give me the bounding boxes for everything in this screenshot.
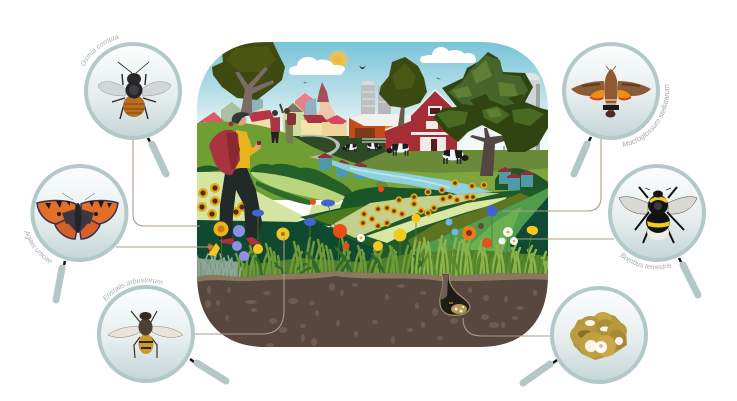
large flowers xyxy=(207,186,538,261)
bumblebee burrow xyxy=(440,273,470,315)
soil stones xyxy=(205,283,537,347)
far silos xyxy=(361,80,391,116)
species label: Aglais urticae: Aglais urticae xyxy=(24,231,52,263)
insect: hoverfly xyxy=(108,311,183,358)
town houses xyxy=(199,82,347,137)
magnifier: Eristalis arbustorum xyxy=(97,278,230,384)
soil xyxy=(197,271,548,347)
species label: Bombus terrestris: Bombus terrestris xyxy=(620,253,672,270)
insect: tortoiseshell butterfly xyxy=(37,193,118,239)
fence xyxy=(362,139,386,142)
field base right xyxy=(329,190,548,258)
flower stems xyxy=(221,205,532,262)
magnifier: bee nest xyxy=(523,288,646,383)
couple of walkers xyxy=(270,104,296,143)
left hill xyxy=(197,122,378,200)
species label: Eristalis arbustorum: Eristalis arbustorum xyxy=(103,278,162,301)
beehives xyxy=(318,153,534,190)
clouds xyxy=(289,47,476,75)
sun xyxy=(328,50,348,68)
magnifier: Bombus terrestris xyxy=(608,164,706,298)
pale strip beside lettuce xyxy=(308,200,344,215)
magnifier: Macroglossum stellatarum xyxy=(562,42,670,178)
dark crop row xyxy=(256,181,313,205)
nest cells xyxy=(570,312,627,360)
insect: bumblebee xyxy=(619,187,697,243)
cows xyxy=(342,143,469,164)
red barn xyxy=(385,90,457,151)
dark ground near path xyxy=(293,136,387,164)
magnifier: Aglais urticae xyxy=(24,164,128,304)
sunflowers xyxy=(197,179,488,230)
central dark hedge xyxy=(300,187,462,228)
small hedge left xyxy=(197,166,222,172)
insect: mason bee xyxy=(98,62,171,119)
olive ground xyxy=(360,150,548,188)
green meadow band xyxy=(415,188,548,253)
birds xyxy=(303,66,441,84)
species label: Osmia cornuta: Osmia cornuta xyxy=(81,36,119,66)
big tree xyxy=(433,52,548,176)
central landscape scene xyxy=(197,42,550,347)
crop row right xyxy=(408,193,530,250)
olive field patch xyxy=(312,206,365,224)
species label: Macroglossum stellatarum: Macroglossum stellatarum xyxy=(622,84,670,148)
magnifier: Osmia cornuta xyxy=(81,36,182,178)
connector lines xyxy=(116,139,614,336)
left tree xyxy=(212,42,285,116)
insect: hummingbird hawk moth xyxy=(571,66,651,118)
winding path xyxy=(300,135,340,159)
hedge behind hives xyxy=(495,168,548,190)
pale strip xyxy=(366,197,507,243)
right green bank xyxy=(382,168,548,192)
river xyxy=(332,160,492,194)
dark meadow xyxy=(197,220,378,266)
orange barn xyxy=(349,114,411,138)
sunflower strip xyxy=(330,193,500,238)
mid tree xyxy=(379,57,427,126)
dark corner meadow xyxy=(510,197,548,256)
hedge above lettuce xyxy=(250,164,352,198)
lettuce rows xyxy=(250,172,346,203)
pale field left xyxy=(197,172,305,222)
hiker xyxy=(209,112,262,245)
sky xyxy=(197,42,548,154)
grass xyxy=(197,234,550,280)
soil surface xyxy=(197,271,548,282)
right silo xyxy=(504,73,540,152)
